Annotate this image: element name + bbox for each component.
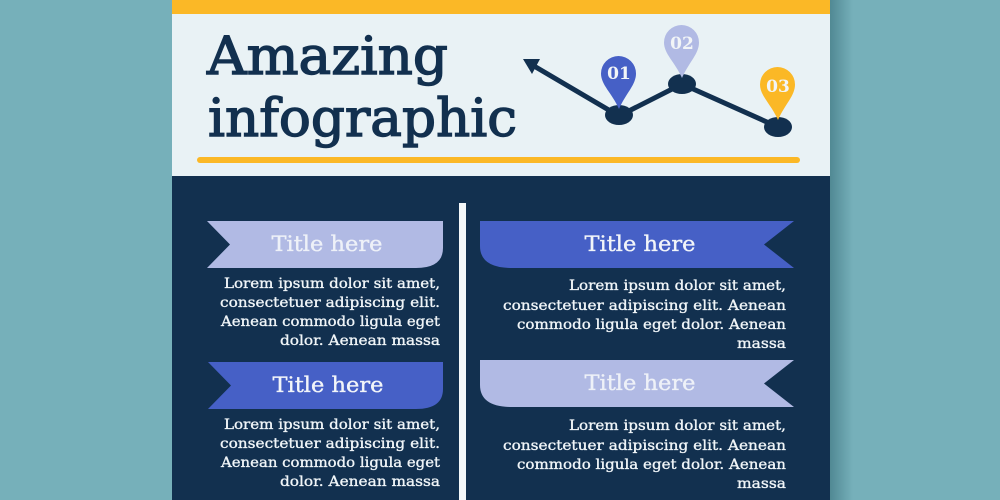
- block: top right: [480, 221, 794, 352]
- body text: consectetuer adipiscing elit.: [220, 295, 440, 311]
- block: top left: [207, 221, 443, 349]
- body text: consectetuer adipiscing elit. Aenean: [503, 438, 786, 454]
- ribbon title: Title here: [584, 371, 696, 395]
- body text: Aenean commodo ligula eget: [220, 314, 440, 330]
- body text: [220, 276, 440, 349]
- body text: massa: [737, 476, 786, 492]
- trend arrow line: [523, 59, 778, 127]
- title: [206, 27, 517, 149]
- pin 03: 03: [766, 77, 790, 97]
- ribbon title: Title here: [584, 232, 696, 256]
- ribbon: [207, 221, 443, 268]
- body text: [503, 278, 786, 352]
- dark content panel: [172, 176, 830, 500]
- ribbon: [480, 221, 794, 268]
- body text: massa: [737, 336, 786, 352]
- chart: trend line with pins: [523, 25, 795, 137]
- body text: consectetuer adipiscing elit. Aenean: [503, 298, 786, 314]
- block: bottom left: [208, 362, 443, 490]
- body text: [220, 417, 440, 490]
- title: infographic: [208, 89, 517, 149]
- node 3: [764, 117, 792, 137]
- pin 03: [760, 67, 795, 120]
- yellow underline: [197, 157, 800, 163]
- pin 01: 01: [607, 64, 631, 84]
- body text: dolor. Aenean massa: [280, 474, 440, 490]
- pin 02: 02: [670, 34, 694, 54]
- ribbon title: Title here: [272, 373, 384, 397]
- body text: [503, 418, 786, 492]
- top yellow band: [172, 0, 830, 14]
- pin 02: [664, 25, 699, 78]
- ribbon: [480, 360, 794, 407]
- body text: consectetuer adipiscing elit.: [220, 436, 440, 452]
- body text: Lorem ipsum dolor sit amet,: [569, 278, 786, 294]
- ribbon: [208, 362, 443, 409]
- body text: Aenean commodo ligula eget: [220, 455, 440, 471]
- body text: commodo ligula eget dolor. Aenean: [517, 317, 786, 333]
- node 1: [605, 105, 633, 125]
- centre divider: [459, 203, 466, 500]
- header panel: [172, 14, 830, 176]
- block: bottom right: [480, 360, 794, 492]
- body text: Lorem ipsum dolor sit amet,: [569, 418, 786, 434]
- node 2: [668, 74, 696, 94]
- ribbon title: Title here: [272, 232, 382, 256]
- body text: commodo ligula eget dolor. Aenean: [517, 457, 786, 473]
- panel shadow: [829, 0, 853, 500]
- title: Amazing: [206, 27, 448, 87]
- body text: Lorem ipsum dolor sit amet,: [224, 276, 440, 292]
- body text: dolor. Aenean massa: [280, 333, 440, 349]
- body text: Lorem ipsum dolor sit amet,: [224, 417, 440, 433]
- pin 01: [601, 56, 636, 109]
